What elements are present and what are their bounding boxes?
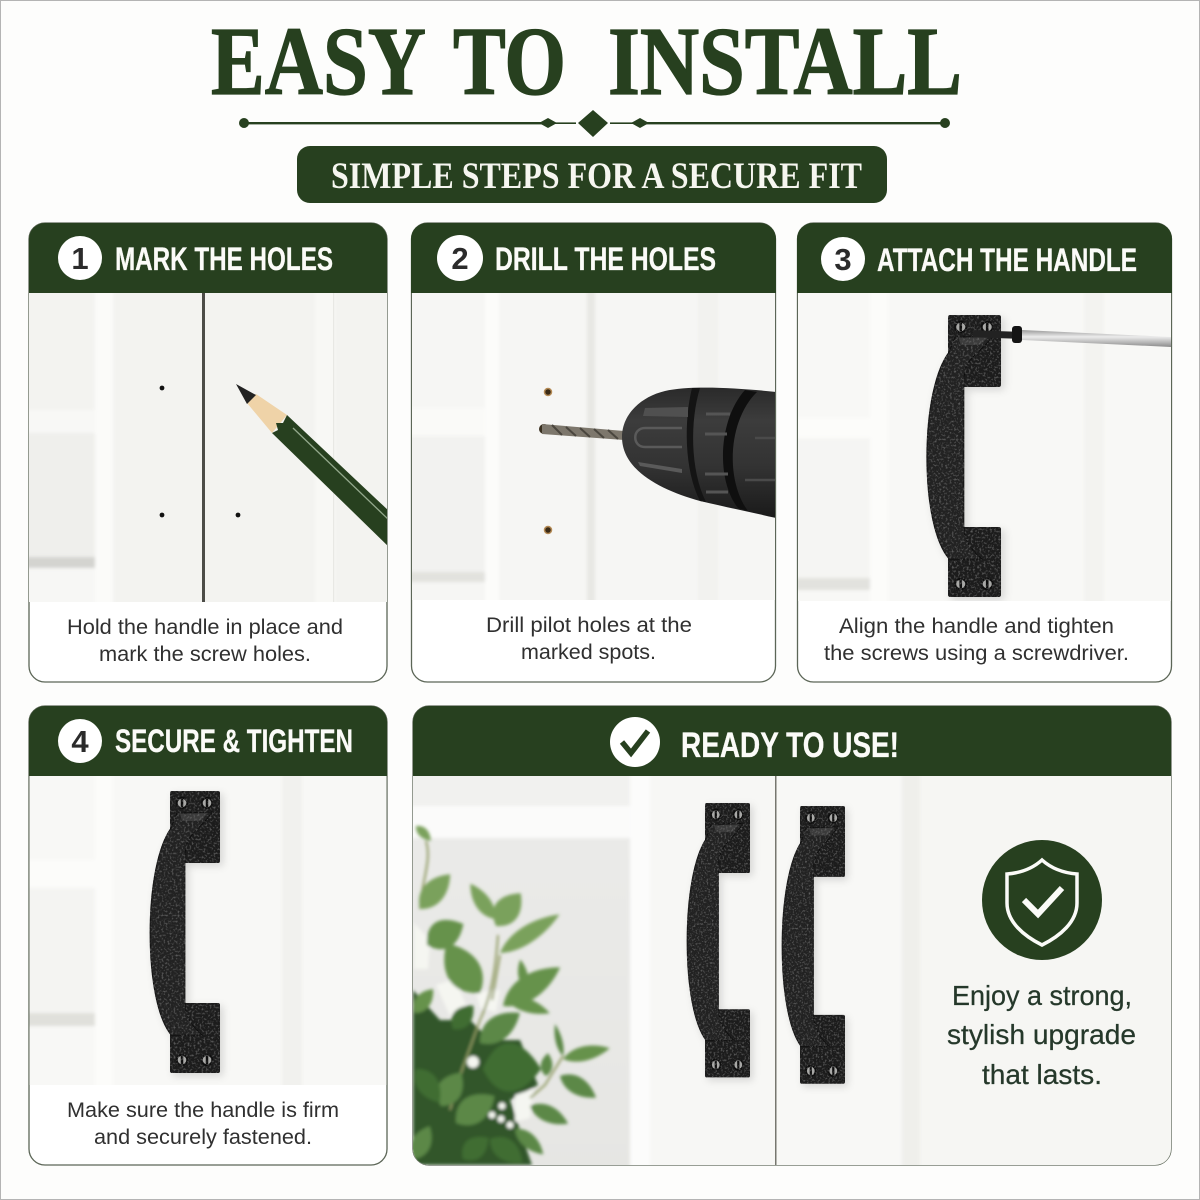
header: step 4 xyxy=(29,706,387,776)
header: step 2: 2 xyxy=(451,241,469,276)
header: step 2: DRILL THE HOLES xyxy=(495,241,716,277)
title xyxy=(211,8,962,115)
door photo: handle and screwdriver xyxy=(790,285,1172,610)
panel: ready to use xyxy=(405,706,1171,1173)
door photo: drill xyxy=(405,285,776,610)
ornamental divider xyxy=(239,110,950,137)
panel: step 2 drill the holes xyxy=(405,223,776,682)
caption: step 1: Hold the handle in place and xyxy=(67,616,343,639)
icon: left handle xyxy=(687,803,750,1077)
header: step 1: MARK THE HOLES xyxy=(115,241,333,277)
door photo: pencil marks xyxy=(25,285,390,610)
door photo: finished handles and plant xyxy=(405,770,1171,1173)
panel: step 4 secure and tighten xyxy=(20,706,387,1165)
icon: shield badge xyxy=(982,840,1102,960)
caption: step 2 xyxy=(486,614,692,664)
icon: pencil xyxy=(236,384,390,548)
caption: step 4 xyxy=(67,1099,339,1149)
panel: step 1 mark the holes xyxy=(25,223,390,682)
subtitle banner xyxy=(297,146,887,203)
header: step 4: 4 xyxy=(71,724,89,759)
title: EASY xyxy=(211,8,426,115)
header: step 3 xyxy=(797,223,1172,293)
caption: step 2: Drill pilot holes at the xyxy=(486,614,692,637)
subtitle banner: SIMPLE STEPS FOR A SECURE FIT xyxy=(331,156,862,197)
callout text xyxy=(947,980,1136,1090)
icon: drill chuck xyxy=(622,388,776,518)
icon: right handle xyxy=(782,806,845,1084)
caption: step 1: mark the screw holes. xyxy=(99,643,311,666)
title: TO xyxy=(453,8,566,115)
header: step 2 xyxy=(411,223,776,293)
header: step 3: 3 xyxy=(834,242,852,277)
callout text: stylish upgrade xyxy=(947,1019,1136,1050)
icon: handle xyxy=(150,791,220,1073)
caption: step 2: marked spots. xyxy=(521,641,656,664)
caption: step 1 xyxy=(67,616,343,666)
title: INSTALL xyxy=(608,8,962,115)
door photo: handle xyxy=(20,770,386,1090)
icon: check badge xyxy=(610,717,660,767)
panel: step 3 attach the handle xyxy=(790,223,1172,682)
drill bit xyxy=(542,424,624,440)
callout text: that lasts. xyxy=(982,1059,1102,1090)
caption: step 3: Align the handle and tighten xyxy=(839,615,1114,638)
callout text: Enjoy a strong, xyxy=(952,980,1132,1011)
caption: step 4: and securely fastened. xyxy=(94,1126,312,1149)
caption: step 4: Make sure the handle is firm xyxy=(67,1099,339,1122)
header: step 1: 1 xyxy=(71,241,89,276)
header: step 1 xyxy=(29,223,387,293)
caption: step 3 xyxy=(824,615,1129,665)
icon: handle xyxy=(927,315,1001,597)
icon: screwdriver xyxy=(973,326,1172,347)
header: ready to use: READY TO USE! xyxy=(681,726,899,765)
header: step 4: SECURE & TIGHTEN xyxy=(115,723,353,759)
caption: step 3: the screws using a screwdriver. xyxy=(824,642,1129,665)
header: ready to use xyxy=(413,706,1171,776)
plant xyxy=(406,822,611,1170)
